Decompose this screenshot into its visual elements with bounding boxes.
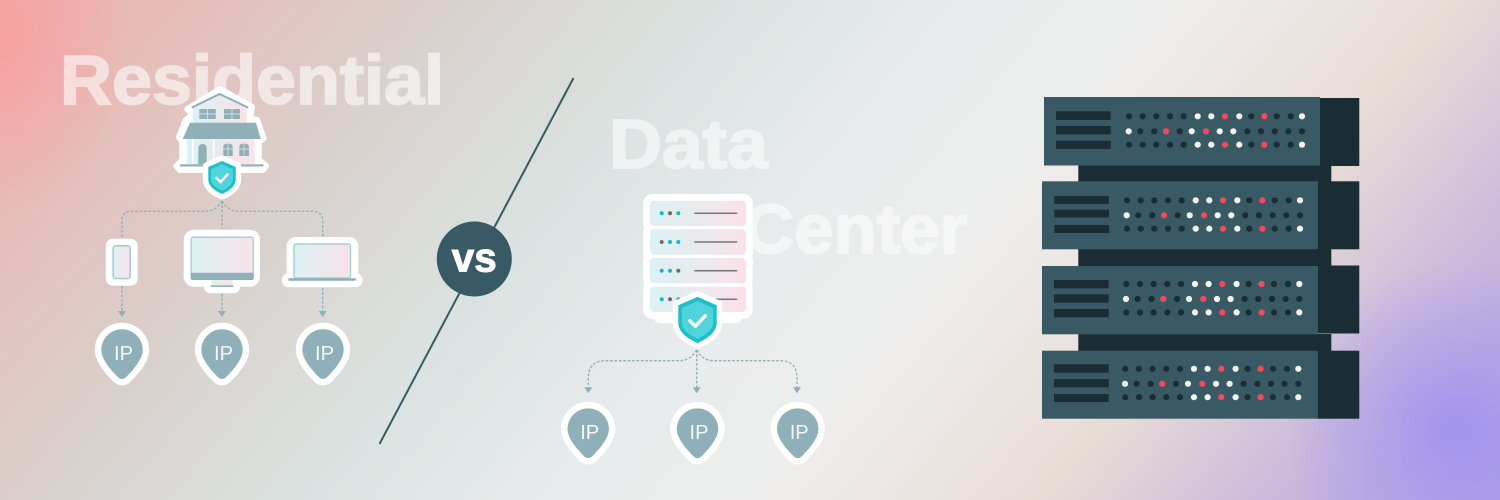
arrows to IP pins [118, 311, 327, 317]
IP pin 1 [101, 329, 143, 379]
server unit 2 [1042, 181, 1359, 249]
icon: laptop [282, 237, 363, 287]
vs badge [437, 222, 512, 296]
IP pin 3: IP [315, 342, 334, 365]
icon: desktop monitor [184, 230, 260, 293]
IP pin 1: IP [580, 421, 599, 444]
IP pin 3: IP [790, 421, 809, 444]
icon: house [176, 89, 266, 170]
heading: Data Center: Center [743, 190, 967, 268]
icon: shield [678, 297, 717, 343]
heading: Residential: Residential [60, 41, 444, 119]
icon: server stack [643, 194, 753, 323]
vs badge: vs [452, 234, 497, 280]
rack connectors [1078, 165, 1331, 351]
panel: large server rack illustration [1042, 97, 1359, 419]
server unit 4 [1042, 351, 1359, 419]
dashed connectors: shield to IP pins [588, 350, 797, 388]
IP pin 3 [777, 408, 818, 458]
server unit 1 [1044, 97, 1359, 166]
icon: phone [106, 239, 138, 286]
IP pin 2: IP [690, 421, 708, 444]
IP pin 2 [677, 408, 718, 458]
icon: shield [208, 161, 236, 194]
server unit 3 [1042, 266, 1359, 334]
diagonal divider line [380, 78, 574, 444]
arrows to IP pins [584, 387, 801, 393]
dashed connectors: shield to devices [122, 201, 323, 312]
IP pin 1 [568, 408, 609, 458]
IP pin 2 [201, 329, 243, 379]
IP pin 2: IP [214, 342, 233, 365]
heading: Data Center: Data [609, 105, 769, 183]
panel: residential diagram [101, 89, 363, 379]
IP pin 3 [302, 329, 344, 379]
heading: Data Center [609, 105, 967, 268]
IP pin 1: IP [114, 342, 133, 365]
panel: data center diagram [568, 194, 818, 458]
